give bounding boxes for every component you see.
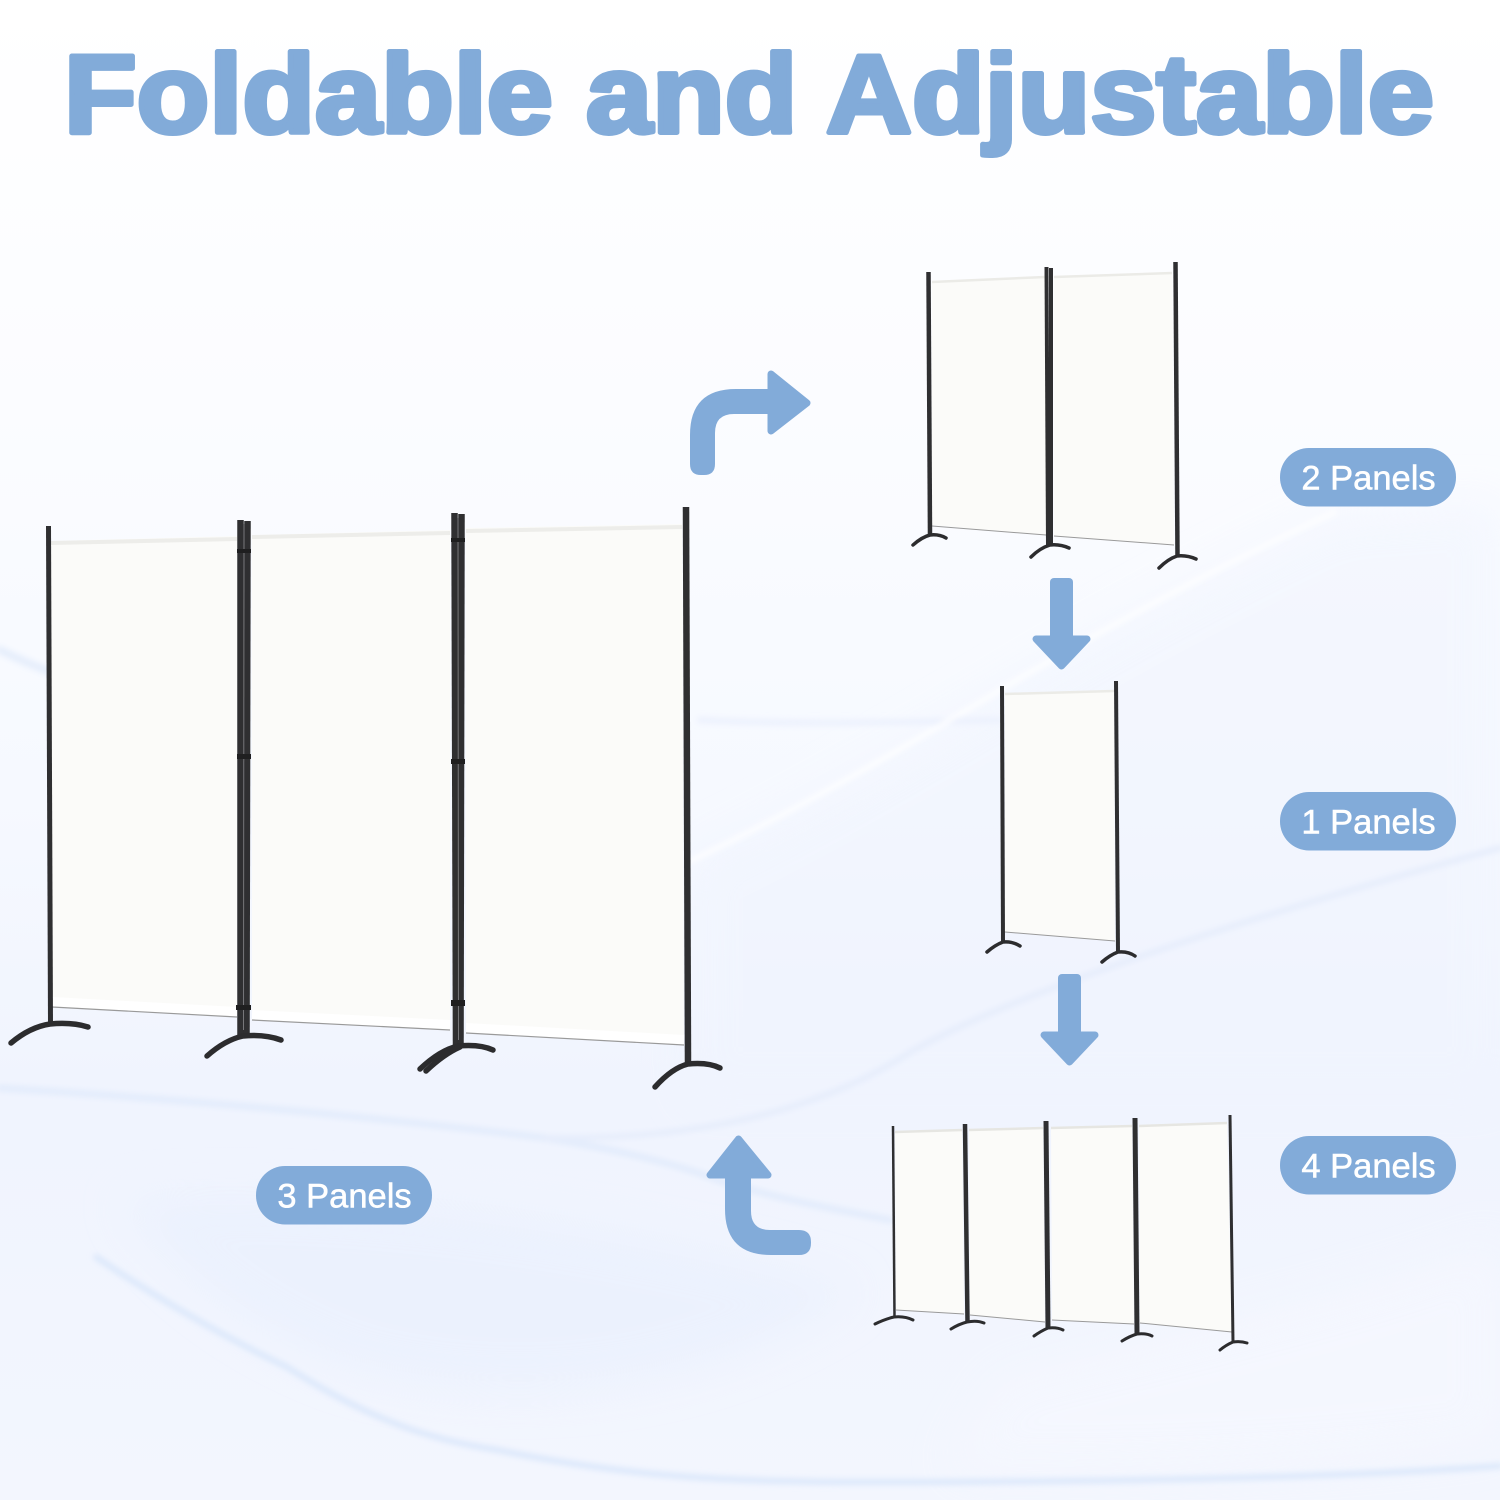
label: 1 Panels bbox=[1280, 792, 1456, 850]
label: 4 Panels: 4 Panels bbox=[1301, 1148, 1436, 1186]
poles bbox=[1002, 681, 1118, 952]
fabric panels bbox=[895, 1122, 1232, 1332]
arrow: right turn bbox=[690, 374, 807, 475]
feet bbox=[875, 1317, 1247, 1350]
poles bbox=[893, 1115, 1233, 1342]
product: 2 panel divider bbox=[913, 262, 1196, 568]
label: 3 Panels bbox=[256, 1166, 432, 1224]
fabric panels bbox=[932, 272, 1174, 545]
product: 1 panel divider bbox=[987, 681, 1135, 962]
feet bbox=[987, 942, 1135, 962]
arrow: down to 1 panel bbox=[1036, 578, 1087, 666]
label: 2 Panels bbox=[1280, 448, 1456, 506]
label: 1 Panels: 1 Panels bbox=[1301, 804, 1436, 842]
arrow: up turn back to 3 panels bbox=[710, 1139, 811, 1255]
poles bbox=[48, 507, 688, 1064]
label: 2 Panels: 2 Panels bbox=[1301, 460, 1436, 498]
fabric panel bbox=[1005, 690, 1115, 941]
poles bbox=[928, 262, 1178, 556]
feet bbox=[11, 1023, 720, 1087]
fabric hems bbox=[895, 1123, 1227, 1132]
feet bbox=[913, 535, 1196, 568]
fabric hems bbox=[932, 273, 1172, 282]
fabric panels bbox=[51, 524, 684, 1045]
product: 3 panel divider bbox=[11, 507, 720, 1087]
product: 4 panel divider bbox=[875, 1115, 1247, 1350]
title: Foldable and Adjustable bbox=[64, 32, 1434, 156]
arrow: down to 4 panels bbox=[1044, 974, 1095, 1062]
fabric hem bbox=[1005, 691, 1114, 694]
label: 4 Panels bbox=[1280, 1136, 1456, 1194]
pole highlights bbox=[244, 518, 458, 1040]
fabric hems bbox=[51, 527, 682, 543]
label: 3 Panels: 3 Panels bbox=[277, 1178, 412, 1216]
clips bbox=[236, 538, 465, 1010]
